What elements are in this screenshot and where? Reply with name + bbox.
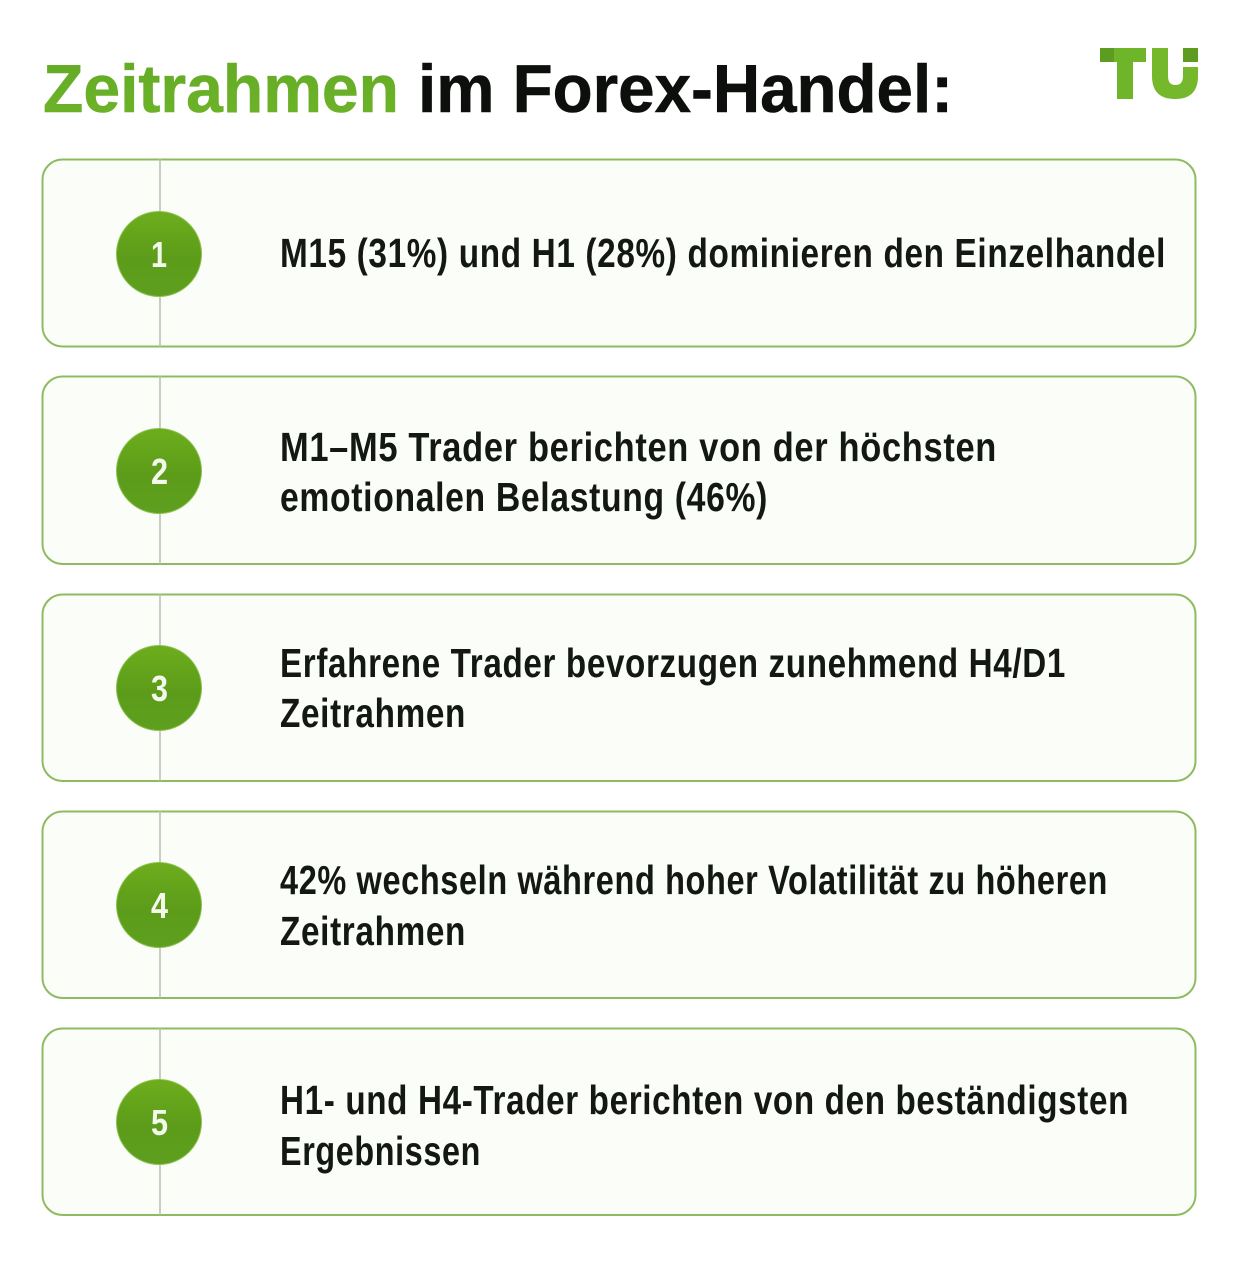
title	[43, 51, 953, 127]
number badge 4: 4	[151, 885, 168, 926]
title: im Forex-Handel:	[418, 51, 953, 127]
number badge 3	[116, 646, 202, 730]
number badge 3: 3	[151, 668, 168, 709]
number badge 2: 2	[151, 451, 168, 492]
icon: TU logo	[1100, 48, 1198, 99]
panel: card 5	[42, 1028, 1196, 1215]
text: card 4	[280, 857, 1108, 954]
panel: card 2	[42, 376, 1196, 564]
text: card 2: emotionalen Belastung (46%)	[280, 474, 768, 520]
panel: card 4	[42, 811, 1196, 998]
text: card 4: Zeitrahmen	[280, 908, 466, 954]
text: card 2: M1–M5 Trader berichten von der höchsten	[280, 424, 997, 470]
number badge 2	[116, 428, 202, 514]
text: card 2	[280, 424, 997, 520]
text: card 5	[280, 1077, 1129, 1174]
number badge 1	[116, 212, 202, 296]
number badge 4	[116, 862, 202, 948]
text: card 3	[280, 640, 1066, 736]
number badge 5: 5	[151, 1102, 168, 1143]
title: Zeitrahmen	[43, 51, 399, 127]
text: card 3: Zeitrahmen	[280, 690, 466, 736]
text: card 5: Ergebnissen	[280, 1128, 481, 1174]
panel: card 1	[42, 159, 1196, 347]
text: card 3: Erfahrene Trader bevorzugen zunehmend H4/D1	[280, 640, 1066, 686]
number badge 5	[116, 1080, 202, 1164]
panel: card 3	[42, 594, 1196, 781]
number badge 1: 1	[151, 234, 167, 275]
